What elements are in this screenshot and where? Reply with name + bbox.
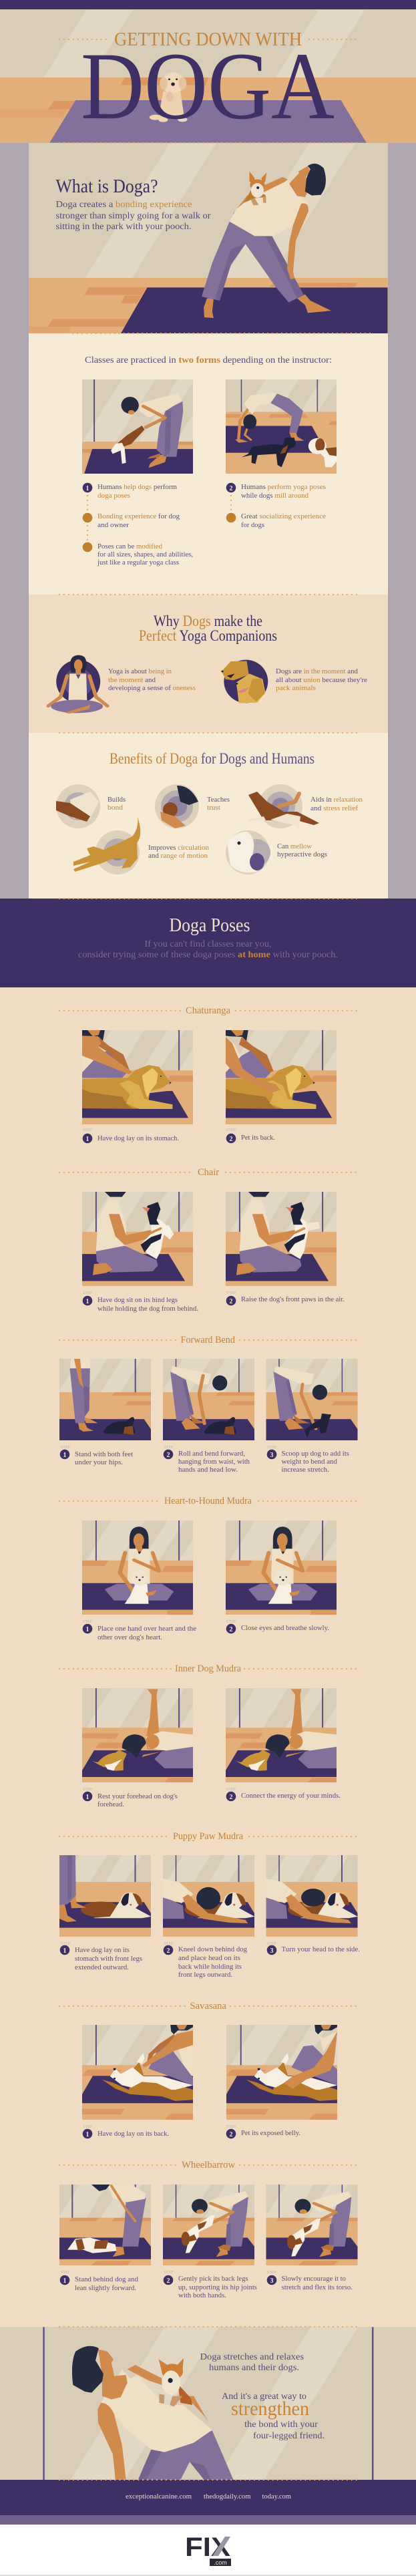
intro text: stronger than simply going for a walk or: [56, 211, 211, 221]
illustration: Heart-to-Hound step 1: [82, 1520, 193, 1615]
illustration: Savasana step 2: [226, 2025, 337, 2120]
step text: Savasana 2: STEP: [226, 2125, 236, 2129]
step text: Forward Bend 1: 1: [63, 1452, 67, 1459]
text: closing message: four-legged friend.: [253, 2431, 325, 2441]
step text: Savasana 2: Pet its exposed belly.: [241, 2129, 300, 2137]
logo: FIX.com: [0, 2525, 416, 2576]
illustration: human yoga with dogs: [226, 379, 337, 474]
illustration: Forward Bend step 3: [266, 1359, 358, 1440]
step text: Wheelbarrow 2: [164, 2271, 257, 2299]
list: form two: while dogs mill around: [241, 492, 308, 500]
step text: Puppy Paw 3: STEP: [267, 1942, 277, 1946]
intro text: Doga creates a bonding experience: [56, 200, 192, 210]
step text: Puppy Paw 3: 3: [270, 1947, 274, 1955]
step text: Forward Bend 2: STEP: [164, 1446, 174, 1450]
step text: Wheelbarrow 2: STEP: [164, 2271, 174, 2275]
step text: Heart-to-Hound 2: Close eyes and breathe slowly.: [241, 1624, 329, 1632]
text: dogs: Dogs are in the moment and: [276, 667, 358, 675]
step text: Puppy Paw 1: Have dog lay on its: [75, 1946, 130, 1954]
benefit: relaxation: Aids in relaxation: [310, 796, 363, 804]
icon: fluffy dog in the letter O: [150, 72, 188, 122]
step text: Chaturanga 2: 2: [230, 1136, 232, 1143]
text: yoga: developing a sense of oneness: [108, 684, 196, 692]
panel: closing message: [0, 2327, 416, 2480]
step text: Heart-to-Hound 2: STEP: [226, 1620, 236, 1624]
step text: Inner Dog 1: [83, 1788, 178, 1808]
list: form one: just like a regular yoga class: [97, 558, 179, 567]
text: yoga: Yoga is about being in: [108, 667, 172, 675]
subtitle: consider trying some of these doga poses at home with your pooch.: [78, 950, 338, 960]
heading: Inner Dog Mudra: Inner Dog Mudra: [175, 1663, 241, 1674]
step text: Wheelbarrow 2: up, supporting its hip joints: [178, 2283, 257, 2291]
step text: Chair 2: [226, 1291, 345, 1305]
step text: Inner Dog 1: STEP: [83, 1788, 93, 1792]
section: Chaturanga: [51, 1005, 364, 1143]
step text: Puppy Paw 1: stomach with front legs: [75, 1955, 142, 1963]
section: Inner Dog Mudra: [51, 1663, 364, 1808]
section: Forward Bend: [28, 1335, 358, 1474]
text: closing message: Doga stretches and relaxes: [200, 2352, 304, 2362]
intro text: sitting in the park with your pooch.: [56, 222, 191, 232]
step text: Savasana 1: [83, 2125, 169, 2138]
step text: Wheelbarrow 3: Slowly encourage it to: [282, 2275, 346, 2283]
footer sources: today.com: [262, 2492, 291, 2501]
text: closing message: humans and their dogs.: [209, 2363, 299, 2373]
illustration: Wheelbarrow step 3: [266, 2185, 358, 2265]
illustration: Puppy Paw step 1: [59, 1855, 151, 1937]
step text: Forward Bend 2: [164, 1446, 250, 1474]
step text: Wheelbarrow 3: 3: [270, 2277, 274, 2285]
list: form one: Bonding experience for dog: [97, 512, 180, 520]
benefit: builds bond: [108, 796, 126, 812]
step text: Puppy Paw 2: [164, 1942, 247, 1979]
list: form two: Humans perform yoga poses: [241, 483, 326, 491]
icon: paw and hand: [56, 784, 100, 828]
step text: Puppy Paw 1: [60, 1942, 142, 1971]
step text: Puppy Paw 1: 1: [63, 1947, 67, 1955]
list: form one: and owner: [97, 521, 129, 529]
heading: Forward Bend: Forward Bend: [180, 1335, 235, 1345]
step text: Puppy Paw 2: back while holding its: [178, 1963, 242, 1971]
step text: Inner Dog 2: Connect the energy of your minds.: [241, 1792, 341, 1800]
illustration: Wheelbarrow step 2: [163, 2185, 254, 2265]
step text: Forward Bend 1: Stand with both feet: [75, 1450, 133, 1458]
text: dogs: all about union because they're: [276, 676, 367, 684]
step text: Puppy Paw 3: Turn your head to the side.: [282, 1945, 360, 1953]
section: Wheelbarrow: [28, 2160, 358, 2299]
footer sources: thedogdaily.com: [204, 2492, 251, 2501]
step text: Chair 2: STEP: [226, 1291, 236, 1295]
icon: spaniel relaxing: [248, 784, 319, 828]
subtitle: [78, 939, 338, 960]
step text: Wheelbarrow 1: [60, 2271, 138, 2292]
list: form one: 1: [85, 485, 89, 492]
footer sources: [0, 2480, 416, 2525]
logo: FIX.com: .com: [214, 2559, 227, 2566]
step text: Inner Dog 1: 1: [85, 1794, 89, 1801]
step text: Heart-to-Hound 1: [83, 1620, 196, 1641]
heading: doga poses: Doga Poses: [170, 915, 250, 936]
list: form two: [226, 483, 326, 529]
text: yoga: the moment and: [108, 676, 156, 684]
benefit: mellow: hyperactive dogs: [277, 850, 327, 858]
step text: Chair 2: 2: [230, 1298, 232, 1305]
list: form one: Poses can be modified: [97, 542, 162, 550]
illustration: human helps dog: [82, 379, 193, 474]
step text: Wheelbarrow 2: Gently pick its back legs: [178, 2275, 248, 2283]
text: closing message: the bond with your: [244, 2420, 318, 2430]
title line: Getting Down With: GETTING DOWN WITH: [114, 29, 302, 50]
logo: FIX.com: FIX: [185, 2533, 230, 2562]
step text: Heart-to-Hound 1: other over dog's heart.: [97, 1633, 162, 1641]
step text: Forward Bend 2: 2: [167, 1452, 170, 1459]
step text: Puppy Paw 2: front legs outward.: [178, 1971, 232, 1979]
heading: why dogs: Perfect Yoga Companions: [139, 627, 277, 644]
illustration: Inner Dog step 1: [82, 1688, 193, 1782]
text: closing message: And it's a great way to: [222, 2392, 306, 2402]
step text: Inner Dog 2: STEP: [226, 1788, 236, 1792]
header banner: [0, 0, 416, 143]
step text: Heart-to-Hound 2: [226, 1620, 329, 1633]
step text: Chair 1: while holding the dog from behind.: [97, 1305, 198, 1313]
illustration: Chaturanga step 2: [226, 1030, 337, 1124]
step text: Inner Dog 2: 2: [230, 1794, 232, 1801]
step text: Savasana 2: [226, 2125, 300, 2138]
illustration: Chair step 1: [82, 1192, 193, 1286]
footer sources: exceptionalcanine.com: [126, 2492, 192, 2501]
illustration: Puppy Paw step 3: [266, 1855, 358, 1937]
step text: Heart-to-Hound 2: 2: [230, 1626, 232, 1633]
benefit: circulation: and range of motion: [148, 852, 208, 860]
step text: Wheelbarrow 1: Stand behind dog and: [75, 2275, 138, 2283]
panel: two forms of classes: [29, 333, 388, 595]
icon: stretching golden dog: [73, 817, 140, 874]
step text: Chaturanga 2: Pet its back.: [241, 1134, 275, 1142]
heading: why dogs: [139, 613, 277, 644]
step text: Forward Bend 1: [60, 1446, 133, 1466]
icon: dog and woman trust: [155, 784, 199, 828]
step text: Heart-to-Hound 1: 1: [85, 1626, 89, 1633]
panel: why dogs make the perfect yoga companions: [29, 595, 388, 733]
list: form two: Great socializing experience: [241, 512, 326, 520]
step text: Puppy Paw 1: STEP: [61, 1942, 71, 1946]
step text: Wheelbarrow 1: lean slightly forward.: [75, 2284, 136, 2292]
section: Heart-to-Hound Mudra: [51, 1496, 364, 1641]
step text: Puppy Paw 2: STEP: [164, 1942, 174, 1946]
step text: Forward Bend 2: hands and head low.: [178, 1466, 238, 1474]
benefit: circulation: Improves circulation: [148, 844, 209, 852]
text: dogs: [276, 667, 367, 692]
section: Chair: [51, 1167, 364, 1313]
step text: Savasana 1: Have dog lay on its back.: [97, 2130, 169, 2138]
illustration: Wheelbarrow step 1: [59, 2185, 151, 2265]
illustration: Inner Dog step 2: [226, 1688, 337, 1782]
step text: Forward Bend 3: weight to bend and: [282, 1458, 337, 1466]
step text: Chair 1: STEP: [83, 1291, 93, 1295]
list: form one: Humans help dogs perform: [97, 483, 177, 491]
heading: why dogs: Why Dogs make the: [154, 613, 262, 629]
intro text: [56, 200, 211, 232]
step text: Forward Bend 2: hanging from waist, with: [178, 1458, 250, 1466]
heading: Savasana: Savasana: [190, 2001, 226, 2011]
step text: Chair 1: Have dog sit on its hind legs: [97, 1296, 178, 1304]
illustration: Savasana step 1: [82, 2025, 193, 2120]
step text: Savasana 2: 2: [230, 2131, 232, 2138]
step text: Chair 1: [83, 1291, 198, 1313]
icon: white bulldog: [226, 830, 270, 874]
illustration: Forward Bend step 2: [163, 1359, 254, 1440]
text: classes intro: Classes are practiced in two forms depending on the instructor:: [85, 355, 332, 365]
title: DOGA: DOGA: [81, 33, 335, 140]
heading: benefits of doga: Benefits of Doga for Dogs and Humans: [110, 750, 315, 767]
figure: woman with corgi on shoulder: [72, 2346, 234, 2480]
benefit: relaxation: [310, 796, 363, 812]
benefit: mellow: [277, 842, 327, 858]
step text: Forward Bend 3: 3: [270, 1452, 274, 1459]
benefit: builds bond: Builds: [108, 796, 126, 804]
benefit: teaches trust: Teaches: [207, 796, 230, 804]
step text: Puppy Paw 2: Kneel down behind dog: [178, 1945, 247, 1953]
step text: Wheelbarrow 1: STEP: [61, 2271, 71, 2275]
step text: Wheelbarrow 3: stretch and flex its torso.: [282, 2283, 353, 2291]
text: yoga: [108, 667, 196, 692]
step text: Chair 2: Raise the dog's front paws in the air.: [241, 1295, 345, 1303]
text: closing message: strengthen: [231, 2398, 309, 2420]
figure: woman in triangle pose with corgi: [202, 164, 331, 318]
step text: Puppy Paw 3: [267, 1942, 360, 1955]
step text: Chaturanga 1: Have dog lay on its stomach.: [97, 1134, 179, 1142]
step text: Savasana 1: 1: [85, 2131, 89, 2138]
benefit: circulation: [148, 844, 209, 860]
illustration: meditating woman: [48, 655, 108, 713]
text: dogs: pack animals: [276, 684, 316, 692]
subtitle: If you can't find classes near you,: [144, 939, 271, 949]
step text: Forward Bend 1: under your hips.: [75, 1458, 123, 1466]
step text: Puppy Paw 2: 2: [167, 1947, 170, 1955]
benefit: teaches trust: trust: [207, 804, 220, 812]
illustration: Forward Bend step 1: [59, 1359, 151, 1440]
step text: Puppy Paw 2: and place head on its: [178, 1954, 240, 1962]
heading: Chaturanga: Chaturanga: [186, 1005, 230, 1016]
list: form two: for dogs: [241, 521, 264, 529]
step text: Wheelbarrow 3: STEP: [267, 2271, 277, 2275]
list: form two: 2: [230, 485, 232, 492]
step text: Heart-to-Hound 1: Place one hand over heart and the: [97, 1625, 196, 1633]
step text: Forward Bend 3: [267, 1446, 349, 1474]
step text: Forward Bend 2: Roll and bend forward,: [178, 1450, 245, 1458]
step text: Chaturanga 2: STEP: [226, 1128, 236, 1132]
heading: Chair: Chair: [198, 1167, 219, 1178]
step text: Chaturanga 1: [83, 1128, 179, 1143]
heading: Wheelbarrow: Wheelbarrow: [182, 2160, 235, 2170]
step text: Inner Dog 2: [226, 1788, 341, 1801]
benefit: builds bond: bond: [108, 804, 124, 812]
step text: Forward Bend 3: Scoop up dog to add its: [282, 1450, 349, 1458]
step text: Wheelbarrow 2: 2: [167, 2277, 170, 2285]
step text: Chaturanga 1: STEP: [83, 1128, 93, 1132]
step text: Forward Bend 3: STEP: [267, 1446, 277, 1450]
heading: Heart-to-Hound Mudra: Heart-to-Hound Mudra: [164, 1496, 252, 1506]
step text: Chaturanga 2: [226, 1128, 275, 1143]
step text: Inner Dog 1: forehead.: [97, 1800, 124, 1808]
list: form one: doga poses: [97, 492, 130, 500]
illustration: two golden dogs: [221, 660, 268, 703]
list: form one: [83, 483, 193, 567]
step text: Forward Bend 3: increase stretch.: [282, 1466, 329, 1474]
step text: Puppy Paw 1: extended outward.: [75, 1963, 129, 1971]
step text: Savasana 1: STEP: [83, 2125, 93, 2129]
step text: Wheelbarrow 3: [267, 2271, 353, 2291]
step text: Forward Bend 1: STEP: [61, 1446, 71, 1450]
side bars: [0, 143, 416, 899]
page background: beige poses section: [0, 987, 416, 2327]
step text: Wheelbarrow 2: with both hands.: [178, 2291, 226, 2299]
panel: benefits: [29, 733, 388, 899]
step text: Inner Dog 1: Rest your forehead on dog's: [97, 1792, 178, 1800]
panel: what is doga: [29, 143, 388, 333]
benefit: relaxation: and stress relief: [310, 804, 358, 812]
step text: Chair 1: 1: [85, 1298, 89, 1305]
list: form one: for all sizes, shapes, and abilities,: [97, 550, 193, 558]
illustration: Puppy Paw step 2: [163, 1855, 254, 1937]
heading: What is Doga?: What is Doga?: [56, 176, 158, 197]
benefit: mellow: Can mellow: [277, 842, 312, 850]
section: Savasana: [51, 2001, 365, 2138]
panel: doga poses banner: [0, 899, 416, 987]
step text: Wheelbarrow 1: 1: [63, 2277, 67, 2285]
benefit: teaches trust: [207, 796, 230, 812]
section: Puppy Paw Mudra: [28, 1831, 360, 1979]
step text: Chaturanga 1: 1: [85, 1136, 89, 1143]
step text: Heart-to-Hound 1: STEP: [83, 1620, 93, 1624]
illustration: Chaturanga step 1: [82, 1030, 193, 1124]
illustration: Heart-to-Hound step 2: [226, 1520, 337, 1615]
text: closing message: [200, 2352, 325, 2441]
illustration: Chair step 2: [226, 1192, 337, 1286]
heading: Puppy Paw Mudra: Puppy Paw Mudra: [173, 1831, 243, 1842]
